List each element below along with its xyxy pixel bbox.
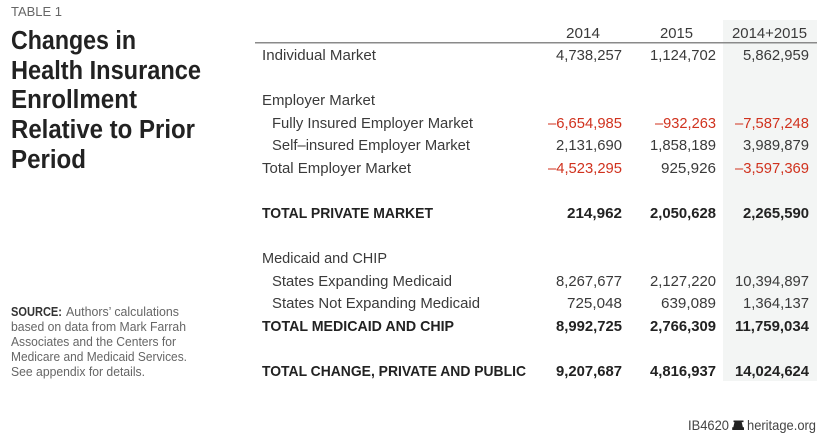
- table row: Total Medicaid and CHIP: 11,759,034: [735, 318, 810, 335]
- footer: report id and website: heritage.org: [747, 417, 816, 433]
- table row: States Expanding Medicaid: 10,394,897: [735, 273, 809, 290]
- table row: Total Private Market: 2,050,628: [650, 205, 716, 222]
- table row: States Not Expanding Medicaid: [272, 295, 809, 312]
- icon: heritage bell: [732, 420, 744, 430]
- source note: Medicare and Medicaid Services.: [11, 350, 187, 364]
- table row: Total Private Market: 2,265,590: [743, 205, 809, 222]
- table row: Self-insured Employer Market: 2,131,690: [556, 137, 622, 154]
- table row: Total Employer Market: [262, 160, 809, 177]
- source note: See appendix for details.: [11, 365, 145, 379]
- table row: Individual Market: 4,738,257: [556, 47, 622, 64]
- source note: based on data from Mark Farrah: [11, 320, 186, 334]
- table row: Medicaid and CHIP heading: Medicaid and CHIP: [262, 250, 387, 267]
- table row: Individual Market: 1,124,702: [650, 47, 716, 64]
- footer: report id and website: [688, 417, 816, 433]
- table row: Individual Market: [262, 47, 809, 64]
- table row: Total Employer Market: Total Employer Market: [262, 160, 412, 177]
- table row: States Expanding Medicaid: 8,267,677: [556, 273, 622, 290]
- table row: Total Private Market: 214,962: [567, 205, 622, 222]
- table row: Self-insured Employer Market: Self–insured Employer Market: [272, 137, 471, 154]
- table row: Fully Insured Employer Market: –7,587,248: [735, 115, 809, 132]
- table row: Total Medicaid and CHIP: TOTAL MEDICAID AND CHIP: [262, 318, 454, 335]
- table row: Fully Insured Employer Market: –932,263: [655, 115, 716, 132]
- table column headers: [566, 25, 807, 42]
- highlighted column background: [723, 20, 817, 381]
- source note: [11, 305, 187, 379]
- table row: Individual Market: Individual Market: [262, 47, 377, 64]
- table row: Total Change, Private and Public: [262, 363, 810, 380]
- table row: Fully Insured Employer Market: [272, 115, 809, 132]
- table row: Total Change, Private and Public: 4,816,937: [650, 363, 716, 380]
- title: Health Insurance: [11, 57, 201, 85]
- table row: Employer Market heading: Employer Market: [262, 92, 376, 109]
- table row: States Not Expanding Medicaid: 725,048: [567, 295, 622, 312]
- label: table number: TABLE 1: [11, 4, 62, 19]
- table row: Total Employer Market: –4,523,295: [548, 160, 622, 177]
- table row: Self-insured Employer Market: [272, 137, 809, 154]
- table row: Total Medicaid and CHIP: 2,766,309: [650, 318, 716, 335]
- table row: Total Medicaid and CHIP: 8,992,725: [556, 318, 622, 335]
- table row: Self-insured Employer Market: 1,858,189: [650, 137, 716, 154]
- table row: Fully Insured Employer Market: Fully Insured Employer Market: [272, 115, 474, 132]
- table column headers: 2014+2015: [732, 25, 807, 42]
- table row: Fully Insured Employer Market: –6,654,985: [548, 115, 622, 132]
- table column headers: 2015: [660, 25, 693, 42]
- table row: Total Change, Private and Public: TOTAL CHANGE, PRIVATE AND PUBLIC: [262, 363, 526, 380]
- title: [11, 27, 201, 174]
- table row: Total Employer Market: –3,597,369: [735, 160, 809, 177]
- table row: States Expanding Medicaid: States Expanding Medicaid: [272, 273, 452, 290]
- title: Enrollment: [11, 86, 137, 114]
- title: Period: [11, 146, 86, 174]
- table row: Individual Market: 5,862,959: [743, 47, 809, 64]
- footer: report id and website: IB4620: [688, 417, 729, 433]
- table row: Self-insured Employer Market: 3,989,879: [743, 137, 809, 154]
- table row: States Not Expanding Medicaid: States Not Expanding Medicaid: [272, 295, 480, 312]
- table row: Total Change, Private and Public: 14,024,624: [735, 363, 810, 380]
- source note: SOURCE:: [11, 305, 62, 319]
- table row: Total Change, Private and Public: 9,207,687: [556, 363, 622, 380]
- table row: States Expanding Medicaid: 2,127,220: [650, 273, 716, 290]
- table row: Total Employer Market: 925,926: [661, 160, 716, 177]
- table row: Total Private Market: TOTAL PRIVATE MARKET: [262, 205, 433, 222]
- table row: States Expanding Medicaid: [272, 273, 809, 290]
- title: Changes in: [11, 27, 136, 55]
- table row: Total Medicaid and CHIP: [262, 318, 810, 335]
- table row: States Not Expanding Medicaid: 1,364,137: [743, 295, 809, 312]
- table row: Total Private Market: [262, 205, 809, 222]
- header rule: [255, 42, 817, 44]
- table row: States Not Expanding Medicaid: 639,089: [661, 295, 716, 312]
- table column headers: 2014: [566, 25, 600, 42]
- source note: Associates and the Centers for: [11, 335, 176, 349]
- source note: Authors’ calculations: [66, 305, 179, 319]
- title: Relative to Prior: [11, 116, 195, 144]
